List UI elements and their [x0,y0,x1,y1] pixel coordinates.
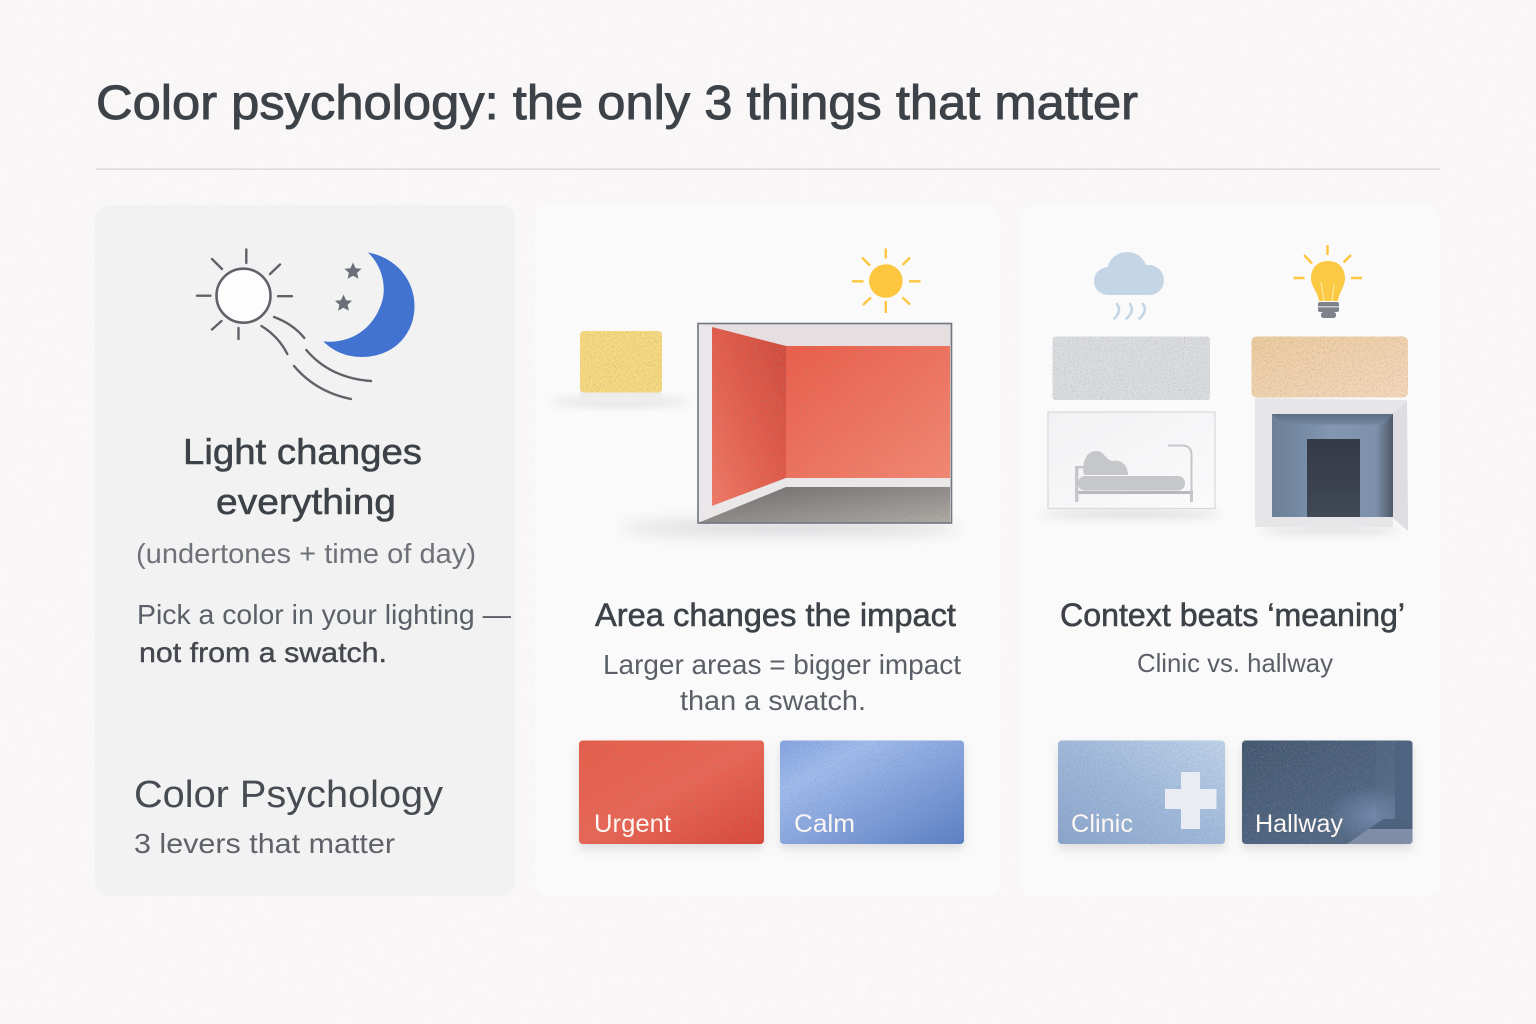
room illustration [620,324,960,534]
beige swatch [1252,336,1408,398]
subtitle: color psychology: Color Psychology [134,774,443,816]
icon: bed [1075,446,1193,502]
title: Color psychology: the only 3 things that matter [96,77,1138,130]
icon: yellow sun [852,248,920,313]
subtitle: color psychology [134,774,443,859]
heading: area changes the impact: Area changes the impact [595,597,956,633]
yellow swatch [550,331,690,404]
subtitle: color psychology: 3 levers that matter [134,828,395,859]
swatch: urgent [579,740,764,844]
text: pick a color advice: Pick a color in your lighting — [137,599,511,630]
heading: light changes everything: everything [216,481,396,522]
icon: sun and moon [197,250,415,399]
grey swatch [1052,336,1210,400]
panel: context beats meaning [1020,205,1440,896]
text: pick a color advice: not from a swatch. [139,637,387,668]
text: undertones note: (undertones + time of day) [136,538,476,569]
text: larger areas [603,649,961,716]
icon: rain cloud [1094,252,1164,318]
text: pick a color advice [137,599,511,668]
swatch: hallway: Hallway [1255,810,1343,838]
swatch: calm [780,740,964,844]
text: larger areas: Larger areas = bigger impact [603,649,961,680]
icon: light bulb [1294,245,1362,318]
swatch: hallway [1242,740,1412,844]
heading: context beats meaning: Context beats ‘meaning’ [1060,597,1405,633]
heading: light changes everything: Light changes [183,431,422,472]
text: larger areas: than a swatch. [680,685,866,716]
swatch: clinic: Clinic [1071,810,1133,838]
clinic room illustration [1040,412,1220,517]
panel: area changes the impact [535,205,1000,896]
text: clinic vs hallway: Clinic vs. hallway [1137,648,1333,678]
swatch: urgent: Urgent [594,810,671,838]
panel: light changes everything [95,205,515,896]
swatch: calm: Calm [794,810,855,838]
hallway illustration [1255,398,1408,533]
swatch: clinic [1058,740,1225,844]
heading: light changes everything [183,431,422,522]
